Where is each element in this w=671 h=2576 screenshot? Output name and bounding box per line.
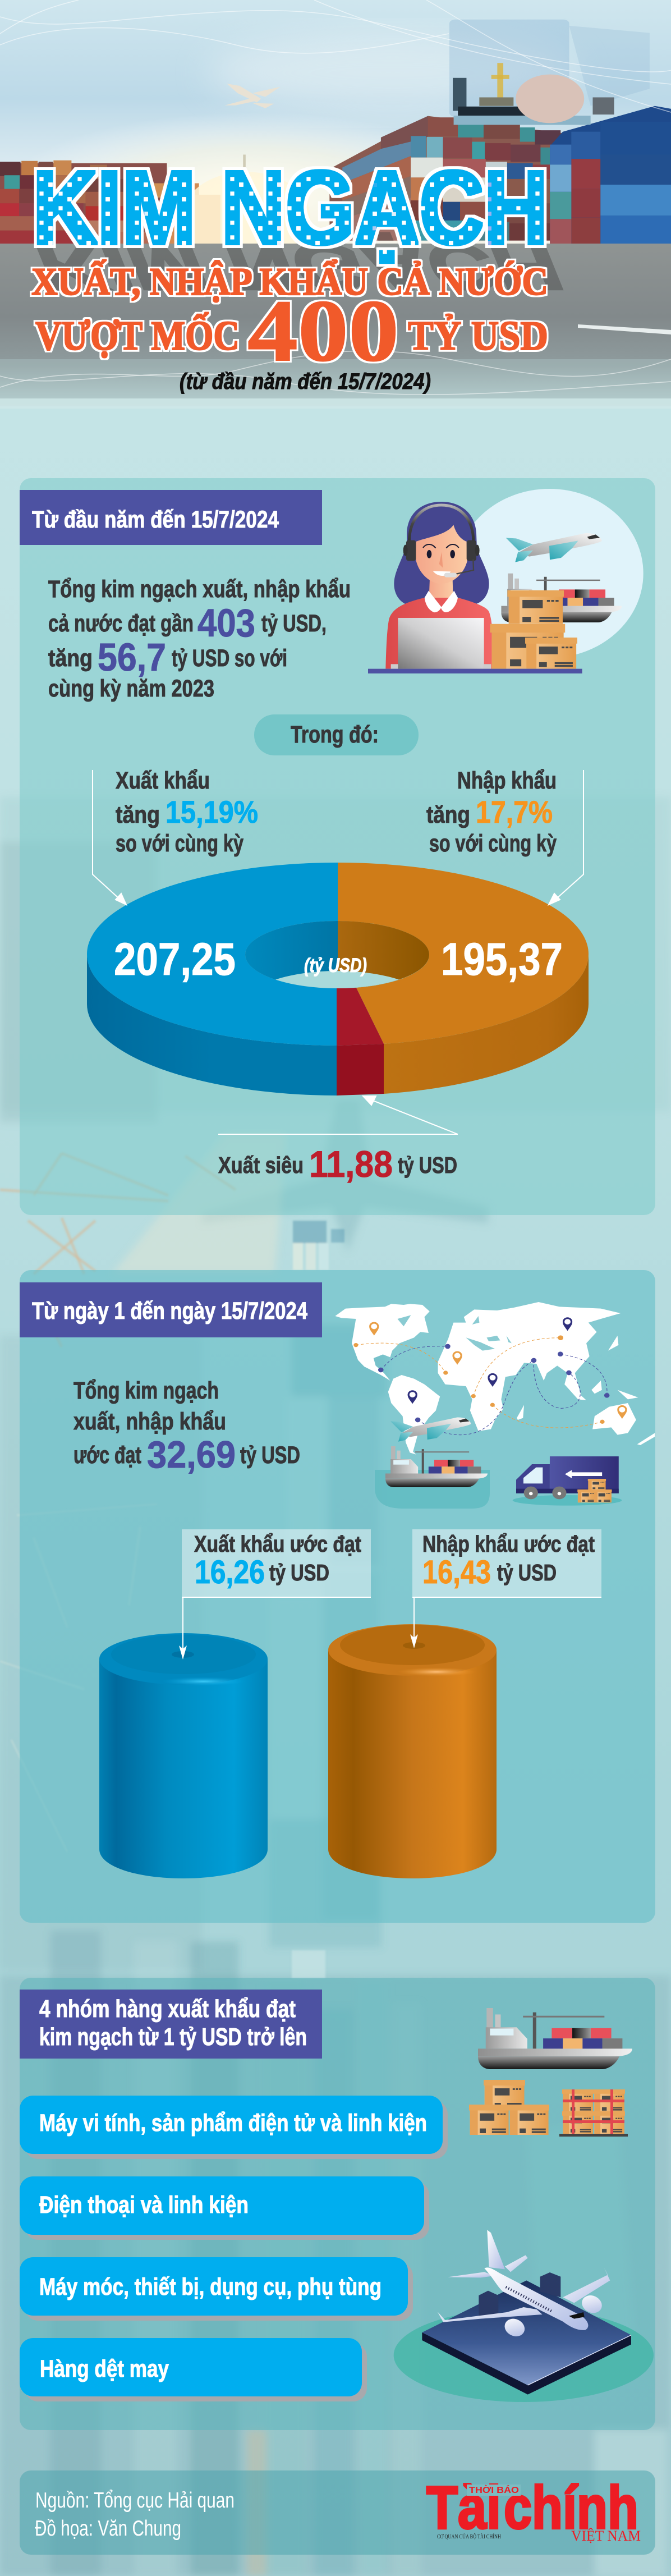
- panel: July 1 to 15: [20, 1270, 655, 1923]
- text: July total: tỷ USD: [240, 1442, 300, 1469]
- bar: computers: [20, 2096, 448, 2159]
- logo: Thời báo Tài chính Việt Nam: Tài: [426, 2473, 501, 2541]
- title: [31, 150, 548, 379]
- panel: four export groups: [20, 1978, 655, 2430]
- callout: exports: tỷ USD: [269, 1560, 329, 1585]
- icon: pallet of boxes: [559, 2089, 628, 2137]
- top right handshake and port montage: [449, 20, 650, 125]
- text: trade surplus: Xuất siêu: [218, 1152, 304, 1178]
- bar: phones: [20, 2176, 429, 2240]
- title line: trade: XUẤT, NHẬP KHẨU CẢ NƯỚC: [31, 259, 548, 304]
- icon: cardboard boxes: [490, 590, 577, 669]
- unit: (tỷ USD): [304, 955, 367, 977]
- text: July total: Tổng kim ngạch: [73, 1377, 219, 1404]
- callout: imports: 16,43: [422, 1554, 491, 1590]
- text: total turnover: Tổng kim ngạch xuất, nhập khẩu: [48, 576, 351, 603]
- heading: year to date: Từ đầu năm đến 15/7/2024: [32, 506, 279, 533]
- pill: of which: [254, 714, 419, 755]
- subtitle: (từ đầu năm đến 15/7/2024): [180, 369, 431, 394]
- text: total turnover: tăng: [48, 645, 93, 672]
- text: total turnover: 56,7: [98, 635, 166, 679]
- text: July total: xuất, nhập khẩu: [73, 1408, 226, 1435]
- cylinder: imports: [328, 1624, 497, 1878]
- heading: year to date: [20, 490, 322, 545]
- text: imports growth: [426, 767, 557, 857]
- bar: machinery: Máy móc, thiết bị, dụng cụ, phụ tùng: [39, 2274, 382, 2300]
- bar: textiles: Hàng dệt may: [40, 2355, 169, 2382]
- text: total turnover: [48, 576, 351, 702]
- text: total turnover: cùng kỳ năm 2023: [48, 675, 214, 702]
- text: trade surplus: [218, 1143, 457, 1185]
- text: exports growth: so với cùng kỳ: [116, 830, 243, 857]
- logo: Thời báo Tài chính Việt Nam: VIỆT NAM: [571, 2528, 641, 2544]
- title line: passes: VƯỢT MỐC: [35, 312, 240, 359]
- callout: exports: Xuất khẩu ước đạt: [194, 1531, 361, 1557]
- left container stack: [0, 161, 220, 245]
- icon: airplane: [506, 533, 602, 562]
- text: July total: ước đạt: [73, 1442, 141, 1469]
- header photo: sky, port containers and road: [0, 0, 671, 409]
- icon: container ship: [501, 574, 622, 622]
- logo: Thời báo Tài chính Việt Nam: THỜI BÁO: [469, 2485, 519, 2495]
- title number: 400: 400: [247, 282, 399, 379]
- text: exports growth: 15,19%: [166, 794, 258, 829]
- arrow: imports to cylinder: [410, 1597, 418, 1648]
- chart: 3D donut: [87, 863, 589, 1096]
- bar: textiles: [20, 2338, 367, 2401]
- bar: phones: Điện thoại và linh kiện: [39, 2192, 249, 2219]
- callout: exports: [182, 1529, 371, 1598]
- text: exports growth: tăng: [116, 801, 160, 828]
- text: graphics credit: Đồ họa: Văn Chung: [35, 2517, 181, 2541]
- arrow: imports callout: [549, 770, 583, 905]
- middle container stack: [329, 116, 563, 241]
- arrow: surplus callout: [218, 1096, 458, 1134]
- panel: footer: [20, 2470, 655, 2555]
- text: trade surplus: tỷ USD: [398, 1152, 457, 1178]
- small airplane in the sky: [224, 84, 281, 108]
- value: imports: 195,37: [441, 934, 563, 985]
- callout: imports: Nhập khẩu ước đạt: [422, 1531, 595, 1557]
- arrow: exports to cylinder: [179, 1597, 187, 1660]
- text: exports growth: Xuất khẩu: [116, 767, 210, 794]
- heading: four export groups: 4 nhóm hàng xuất khẩu đạt: [39, 1995, 296, 2023]
- callout: imports: tỷ USD: [497, 1560, 557, 1585]
- shadow of the title: KIM NGẠCH: [25, 231, 573, 303]
- pill: of which: Trong đó:: [291, 721, 379, 748]
- bar: computers: Máy vi tính, sản phẩm điện tử và linh kiện: [39, 2110, 427, 2137]
- icon: ship on water: [375, 1446, 490, 1509]
- arrow: exports callout: [93, 770, 126, 905]
- icon: airliner on platform: [394, 2230, 654, 2402]
- text: total turnover: 403: [197, 601, 255, 645]
- heading: July 1 to 15: [20, 1282, 322, 1337]
- text: total turnover: tỷ USD so với: [172, 645, 287, 672]
- text: imports growth: Nhập khẩu: [457, 767, 557, 794]
- decorative network lines: [0, 0, 671, 395]
- icon: world map with routes: [335, 1302, 655, 1455]
- blue container stack: [550, 106, 671, 246]
- text: imports growth: 17,7%: [476, 794, 553, 829]
- text: trade surplus: 11,88: [309, 1143, 393, 1185]
- text: exports growth: [116, 767, 258, 857]
- text: July total: 32,69: [147, 1433, 236, 1476]
- callout: exports: 16,26: [195, 1554, 265, 1590]
- heading: July 1 to 15: Từ ngày 1 đến ngày 15/7/2024: [32, 1298, 307, 1324]
- cylinder: exports: [99, 1633, 268, 1878]
- icon: cargo ship: [478, 2008, 632, 2069]
- text: total turnover: cả nước đạt gần: [48, 610, 194, 637]
- text: July total: [73, 1377, 300, 1476]
- text: imports growth: so với cùng kỳ: [429, 830, 557, 857]
- icon: delivery truck: [513, 1456, 622, 1506]
- title line: billion USD: TỶ USD: [408, 313, 548, 359]
- text: total turnover: tỷ USD,: [261, 610, 327, 637]
- logo: Thời báo Tài chính Việt Nam: [426, 2473, 641, 2544]
- value: exports: 207,25: [114, 934, 236, 985]
- logo: Thời báo Tài chính Việt Nam: CƠ QUAN CỦA BỘ TÀI CHÍNH: [437, 2533, 501, 2540]
- text: source: Nguồn: Tổng cục Hải quan: [35, 2488, 235, 2513]
- heading: four export groups: [20, 1990, 322, 2059]
- panel: year to date: [20, 478, 655, 1215]
- text: imports growth: tăng: [426, 801, 470, 828]
- logo: Thời báo Tài chính Việt Nam: chính: [504, 2473, 638, 2541]
- icon: stacked boxes: [469, 2080, 549, 2135]
- bar: machinery: [20, 2257, 413, 2321]
- icon: airplane over map: [390, 1418, 471, 1442]
- icon: operator with cargo: [368, 489, 644, 673]
- callout: imports: [412, 1529, 601, 1598]
- heading: four export groups: kim ngạch từ 1 tỷ USD trở lên: [39, 2023, 307, 2051]
- title line: KIM NGẠCH: KIM NGẠCH: [33, 150, 548, 266]
